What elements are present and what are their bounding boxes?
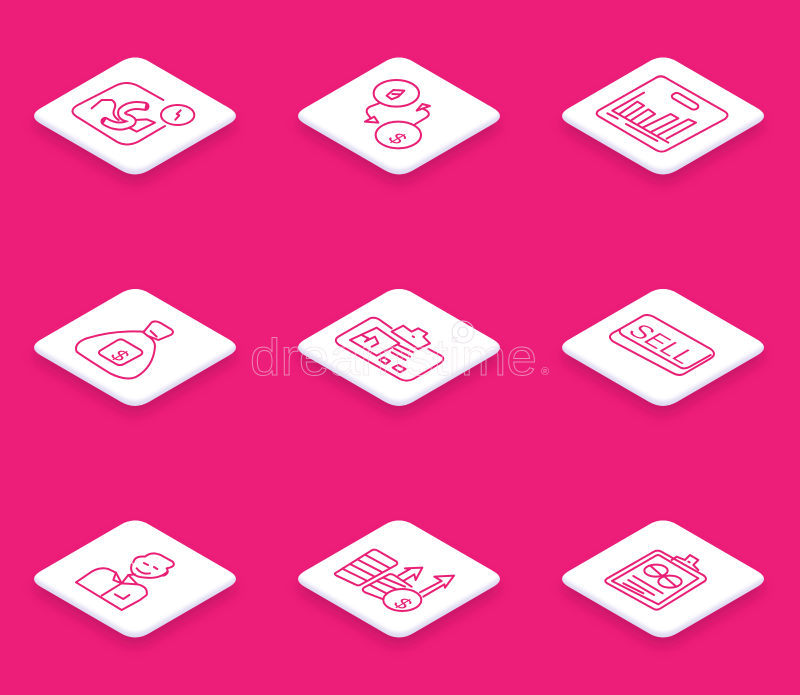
tile: coins growth xyxy=(289,514,509,646)
icon: currency exchange: $ xyxy=(382,130,413,148)
tile: clipboard with pills xyxy=(553,514,773,646)
tile: sell button xyxy=(553,282,773,415)
icon: badge card xyxy=(336,318,443,381)
tile: bitcoin dollar exchange xyxy=(289,51,509,183)
watermark: ® xyxy=(541,366,549,378)
icon: coin stacks with arrows xyxy=(335,550,454,613)
icon: money bag xyxy=(76,321,173,379)
tile: dollar banknote with coin xyxy=(25,51,245,183)
tile: businessman xyxy=(25,514,245,646)
tile: business ID card xyxy=(289,282,509,415)
watermark: dreamstime xyxy=(250,329,537,387)
icon: bar chart xyxy=(597,76,727,152)
icon: sell sign xyxy=(610,315,714,375)
tile: money bag xyxy=(25,282,245,415)
text: SELL: SELL xyxy=(621,320,704,368)
icon: currency exchange xyxy=(365,80,430,148)
icon: person xyxy=(76,553,174,610)
icon: money bag: $ xyxy=(105,347,135,365)
tile: bar chart document xyxy=(553,51,773,183)
icon: dollar note and coin xyxy=(72,83,194,144)
icon: clipboard xyxy=(605,551,706,610)
icon: coin stacks with arrows: $ xyxy=(388,595,418,613)
